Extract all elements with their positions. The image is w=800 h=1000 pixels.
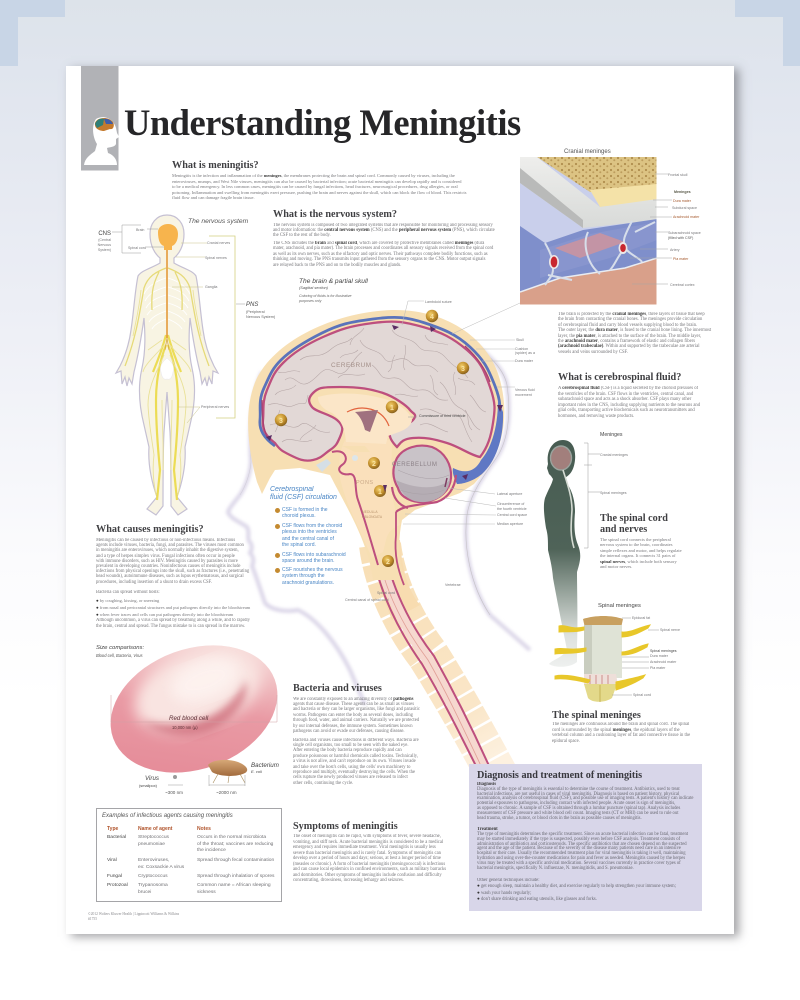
text: bacteria and viruses, part 1: through food, water, and animal carriers. Naturally we are protected — [293, 718, 419, 723]
leader lines and anatomical labels — [345, 300, 535, 602]
virus: ~300 nm — [165, 790, 183, 795]
leader lines and anatomical labels: Spinal cord — [377, 591, 395, 595]
icon: grey tab with head and brain — [81, 66, 118, 170]
table: infectious agents — [96, 808, 282, 902]
text: what causes meningitis: head wounds), autoimmune diseases, such as lupus erythematosus, and surgical — [96, 574, 244, 579]
background side block left — [0, 17, 18, 66]
labels: central nervous system: (Central — [98, 238, 111, 242]
bacterium: E. coli — [251, 769, 262, 774]
prevention text: ● get enough sleep, maintain a healthy diet, and exercise regularly to help strengthen your immune system; — [477, 884, 676, 889]
text: bacteria and viruses, part 2: cells rupture the newly produced viruses are released to infect — [293, 775, 408, 780]
background corner block left — [0, 0, 65, 17]
text: symptoms of meningitis: and dormitories. Other symptoms of meningitis include confusion and difficulty — [293, 872, 442, 878]
table rows: Common name = African sleeping — [197, 883, 271, 888]
table rows: Cryptococcus — [138, 874, 168, 879]
text: bacteria and viruses, part 2: produce poisonous or harmful chemicals called toxins. Technically, — [293, 754, 418, 759]
leader lines and anatomical labels: Lambdoid suture — [425, 300, 452, 304]
table header: Notes — [197, 826, 211, 832]
text: what causes meningitis: prevalent in developing countries. Noninfectious causes of meningitis include — [96, 564, 240, 569]
diagnosis text: Diagnosis — [477, 782, 496, 787]
labels: peripheral nerves: Peripheral nerves — [201, 405, 229, 409]
section labels on brain: CEREBRUM — [331, 362, 372, 369]
text: spinal cord and nerves: spinal nerves, which include both sensory — [600, 558, 677, 564]
chart: body silhouette with meninges — [544, 432, 628, 667]
legend items — [275, 507, 346, 586]
legend items: arachnoid granulations. — [282, 580, 334, 586]
text: spinal cord and nerves: and motor nerves. — [600, 564, 632, 569]
treatment text: virus may be treated with a specific antiviral medication. Several vaccines currently in practice cover types of — [477, 861, 681, 866]
text: what is the nervous system, part 1 — [273, 222, 495, 238]
labels: central nervous system: Brain — [136, 228, 144, 232]
text: what is cerebrospinal fluid — [558, 386, 700, 418]
table rows: the incidence — [197, 848, 226, 853]
numbered circulation markers: 3 — [461, 366, 465, 373]
text: bacteria and viruses, part 1 — [293, 696, 420, 734]
diagnosis text: potential exposures to pathogens, including contact with infected people. Acute onset is sign of meningitis, — [477, 801, 675, 806]
labels: central nervous system — [98, 225, 164, 253]
treatment text: may be started immediately if the type is suspected, possibly even before CSF analysis. Treatment consists of — [477, 837, 680, 842]
legend items: system through the — [282, 573, 325, 579]
leader lines and anatomical labels: Lateral aperture — [497, 492, 522, 496]
table rows: of the throat; vaccines are reducing — [197, 842, 273, 847]
spinal labels: Spinal nerve — [660, 628, 680, 632]
text: bacteria and viruses, part 1: worms. Pathogens can enter the body as several doses, including — [293, 713, 413, 718]
diagnosis text: as opposed to chronic. A sample of CSF is obtained through a lumbar puncture (spinal tap). Analysis includes — [477, 806, 680, 811]
treatment text: The type of meningitis determines the specific treatment. Since an acute bacterial infection can be fatal, treatment — [477, 832, 688, 837]
chart: spinal meninges — [554, 603, 680, 702]
chart: size comparison of red blood cell, bacterium and virus: 10,000 nm (µ) — [172, 725, 198, 730]
table rows: Viral — [107, 858, 117, 863]
text: what is cerebrospinal fluid: subarachnoid space and acts as a shock absorber. CSF plays many other — [558, 397, 691, 402]
text: cranial meninges description: The outer layer, the dura mater, is fused to the cranial bone lining. The innermost — [558, 328, 711, 333]
text: cranial meninges description: the arachnoid mater, contains a framework of elastic and collagen fibers — [558, 339, 695, 344]
text: spinal cord and nerves: the internal organs. It connects 31 pairs of — [600, 553, 676, 558]
text: how it spreads: Bacteria can spread without hosts: — [96, 590, 160, 594]
text: the spinal meninges: epidural space. — [552, 738, 580, 744]
numbered circulation markers: 4 — [430, 314, 434, 321]
virus: (smallpox) — [139, 783, 158, 788]
meninges labels: Meninges — [600, 432, 623, 438]
brain folds — [268, 328, 486, 442]
legend heading — [270, 486, 337, 501]
text: what is the nervous system, part 1: The nervous system is composed of two integrated systems that are responsible for monitoring and processing sensory — [273, 222, 493, 228]
diagnosis text — [477, 782, 694, 821]
spinal labels: Spinal cord — [633, 693, 651, 697]
text: what causes meningitis — [96, 538, 250, 585]
text: symptoms of meningitis: severe than bacterial meningitis and is rarely fatal. Symptoms of meningitis can — [293, 850, 441, 856]
table rows: Trypanosoma — [138, 883, 168, 888]
text: the spinal meninges — [552, 722, 690, 744]
spine and spinal cord — [371, 540, 497, 775]
text: what is the nervous system, part 2: thinking and moving. The PNS transmits input gathered from the sensory organs to the CNS. Motor output signals — [273, 257, 485, 262]
brain and partial skull caption: (Sagittal section) — [299, 285, 329, 290]
chart: nervous system figure — [98, 214, 276, 516]
text: bacteria and viruses, part 2: single cell organisms, too small to be seen with the naked eye. — [293, 743, 409, 748]
poster panel — [66, 66, 734, 934]
diagnosis text: measurement of CSF pressure and white blood cell count. Imaging tests (CT or MRI) can be used to rule out — [477, 811, 678, 816]
section labels on brain: OBLONGATA — [362, 515, 383, 519]
spinal labels: Spinal meninges — [650, 649, 677, 653]
numbered circulation markers: 3 — [279, 418, 283, 425]
prevention text: ● wash your hands regularly; — [477, 890, 531, 896]
table rows: Occurs in the normal microbiota — [197, 835, 266, 840]
leader lines and anatomical labels: Commissure of third ventricle — [419, 414, 466, 418]
numbered circulation markers: 1 — [390, 405, 394, 412]
text: symptoms of meningitis: concentrating, drowsiness, increasing lethargy and seizures. — [293, 878, 404, 883]
labels: peripheral nerves: Cranial nerves — [207, 241, 230, 245]
table title: Examples of infectious agents causing meningitis — [102, 813, 233, 819]
diagnosis text: examination, analysis of cerebrospinal fluid (CSF), and possible use of imaging tests. A patient's history can indicate — [477, 796, 693, 801]
text: symptoms of meningitis: develop over a period of hours and days; serious, at best a longer period of time — [293, 856, 441, 861]
table rows: Fungal — [107, 874, 122, 879]
text: what is cerebrospinal fluid: the ventricles of the brain. CSF flows in the ventricles, central canal, and — [558, 392, 693, 396]
cranial meninges labels: Frontal skull — [668, 173, 688, 177]
section labels on brain — [331, 362, 437, 519]
heading: what is the nervous system: What is the nervous system? — [273, 209, 397, 220]
meninges labels — [584, 432, 628, 548]
legend items: CSF flows into subarachnoid — [282, 552, 346, 558]
text: symptoms of meningitis: The onset of meningitis can be rapid, with symptoms of fever, severe headache, — [293, 834, 441, 839]
cranial meninges labels: Pia mater — [673, 257, 689, 261]
brain and partial skull caption — [298, 278, 368, 303]
spinal labels — [598, 603, 680, 697]
text: the spinal meninges: cord is surrounded by the spinal meninges, the epidural layers of the — [552, 728, 680, 732]
CSF circulation legend — [270, 486, 346, 586]
background corner block right — [735, 0, 800, 17]
heading: what is cerebrospinal fluid: What is cerebrospinal fluid? — [558, 372, 681, 383]
text: what is meningitis: enteroviruses, mumps, and West Nile viruses, meningitis can also be caused by bacterial infection; acute bacterial meningitis can develop rapidly and is considered — [172, 178, 462, 184]
leader lines and anatomical labels: the fourth ventricle — [497, 507, 527, 511]
heading: what is meningitis: What is meningitis? — [172, 160, 259, 171]
text: what is meningitis — [172, 173, 466, 200]
labels: peripheral nerves: PNS — [246, 302, 258, 308]
labels: peripheral nerves: (Peripheral — [246, 310, 265, 314]
text: what is meningitis: to be a medical emergency. In less common cases, meningitis can be caused by fungal infections, head fractures, neurosurgical procedures, drug allergies, or oral — [172, 184, 458, 189]
text: cranial meninges description: of cerebrospinal fluid and carry blood vessels supplying blood to the brain. — [558, 323, 697, 328]
leader lines and anatomical labels: movement — [515, 393, 532, 397]
brainstem — [339, 440, 400, 558]
heading: the spinal cord and nerves — [600, 513, 668, 535]
treatment text: Treatment — [477, 827, 498, 832]
cranial meninges labels: Meninges — [674, 190, 691, 194]
corpus callosum and third ventricle — [318, 393, 412, 452]
list: transmission routes — [96, 598, 250, 617]
labels: central nervous system: System) — [98, 248, 111, 252]
text: what is the nervous system, part 2 — [273, 240, 494, 268]
leader lines and anatomical labels: Circumference of — [497, 502, 524, 506]
virus — [139, 775, 183, 795]
legend items: CSF flows from the choroid — [282, 522, 342, 528]
legend heading: Cerebrospinal — [270, 486, 314, 493]
text: cranial meninges description: the brain from contacting the cranial bones. The meninges provide circulation — [558, 317, 702, 322]
table rows: Spread through inhalation of spores — [197, 874, 274, 879]
cranial meninges labels: Arachnoid mater — [673, 215, 700, 219]
cranial meninges labels: Cerebral cortex — [670, 283, 695, 287]
footer credit — [88, 912, 179, 921]
text: bacteria and viruses, part 2: and take over the host's cells, using the cells' own machinery to — [293, 765, 410, 770]
table rows: brucei — [138, 890, 151, 895]
panel heading: Diagnosis and treatment of meningitis — [477, 770, 642, 781]
cranial meninges labels — [564, 149, 701, 287]
treatment text: bacterial meningitis, specifically N. influenzae, N. meningitidis, and S. pneumoniae. — [477, 866, 634, 871]
text: what causes meningitis: with immune disorders, such as HIV. Meningitis caused by parasites is more — [96, 559, 238, 564]
text: cranial meninges description: (arachnoid trabeculae). Within and supported by the trabeculae are arterial — [558, 344, 700, 349]
text: symptoms of meningitis: vomiting, and stiff neck. Acute bacterial meningitis is considered to be a medical — [293, 840, 443, 844]
text: what is the nervous system, part 2: as well as its own nerves, such as the olfactory and optic nerves. Their pathways complete bodily functions, such as — [273, 252, 488, 256]
skull bone — [248, 310, 504, 580]
meninges labels: Cranial meninges — [600, 453, 628, 457]
head silhouette — [228, 330, 530, 705]
list: transmission routes: ● by coughing, kissing, or sneezing — [96, 598, 159, 602]
spinal labels: Arachnoid mater — [650, 660, 677, 664]
text: what is meningitis: poisoning. Inflammation and swelling from meningitis exert pressure, pushing the brain and nerves against the skull, which can block the flow of blood. This restricts — [172, 190, 466, 194]
fluid pathway around brainstem — [332, 451, 378, 565]
text: cranial meninges description: vessels and veins surrounded by CSF. — [558, 350, 628, 355]
list: transmission routes: ● from nasal and pericranial structures and put pathogens directly into the bloodstream — [96, 604, 250, 610]
treatment text: hydration and using over-the-counter medications for pain and fever as needed. Meningitis caused by the herpes — [477, 856, 685, 861]
text: what is meningitis: Meningitis is the infection and inflammation of the meninges, the membranes protecting the brain and spinal cord. Commonly caused by viruses, including the — [172, 173, 455, 178]
heading: the spinal cord and nerves: and nerves — [600, 524, 647, 535]
legend items: space around the brain. — [282, 558, 335, 564]
leader lines and anatomical labels: Dura mater — [515, 359, 534, 363]
bacterium: ~2000 nm — [216, 790, 237, 795]
treatment text — [477, 827, 688, 871]
chart: cranial meninges cross section — [520, 148, 701, 304]
text: bacteria and viruses, part 2: After entering the body bacteria reproduce rapidly and can — [293, 748, 402, 753]
cranial meninges labels: (filled with CSF) — [668, 236, 693, 240]
prevention text: Other general techniques include: — [477, 878, 540, 882]
numbered circulation markers: 2 — [372, 461, 376, 468]
text: symptoms of meningitis — [293, 834, 446, 883]
text: bacteria and viruses, part 1: agents that cause disease. These agents can be as small as viruses — [293, 702, 414, 707]
heading: what causes meningitis: What causes meningitis? — [96, 524, 204, 535]
footer credit: #1755 — [88, 917, 97, 921]
table rows — [107, 834, 274, 895]
table header: Type — [107, 826, 118, 832]
section labels on brain: CEREBELLUM — [392, 461, 437, 468]
text: what is meningitis: fluid flow and can damage fragile brain tissue. — [172, 195, 255, 200]
labels: peripheral nerves: Nervous System) — [246, 315, 276, 319]
background side block right — [783, 17, 800, 66]
text: what is cerebrospinal fluid: glial cells, transporting active biochemicals such as neurotransmitters and — [558, 408, 695, 413]
spinal labels: Dura mater — [650, 654, 669, 658]
legend items: CSF is formed in the — [282, 507, 328, 513]
spinal labels: Pia mater — [650, 666, 666, 670]
legend items: and the central canal of — [282, 536, 334, 542]
table rows: Protozoal — [107, 883, 128, 888]
brain and partial skull caption: Coloring of fluids is for illustrative — [299, 294, 352, 298]
leader lines and anatomical labels: (spider) as a — [515, 351, 535, 355]
cranial meninges labels: Subdural space — [672, 206, 697, 210]
leader lines and anatomical labels: Central cord space — [497, 513, 527, 517]
table rows: sickness — [197, 890, 216, 895]
heading: symptoms of meningitis: Symptoms of meningitis — [293, 821, 398, 832]
legend heading: fluid (CSF) circulation — [270, 494, 337, 501]
text: symptoms of meningitis: and can cause local epidemics in confined environments, such as military barracks — [293, 867, 446, 872]
section labels on brain: MEDULLA — [362, 510, 378, 514]
brain and partial skull caption: The brain & partial skull — [299, 278, 368, 285]
cranial meninges labels: Subarachnoid space — [668, 231, 701, 235]
cerebellum — [392, 446, 456, 585]
leader lines and anatomical labels: Skull — [516, 338, 524, 342]
text: what causes meningitis: agents include viruses, bacteria, fungi, and parasites. The viruses most common — [96, 543, 244, 548]
flow arrows — [266, 325, 503, 492]
labels: central nervous system: Nervous — [98, 243, 111, 247]
text: what is cerebrospinal fluid: important roles in the CNS, including supplying nutrients to the neurons and — [558, 402, 700, 408]
numbered circulation markers — [275, 310, 469, 567]
prevention text — [477, 878, 676, 902]
cranial meninges labels: Dura mater — [673, 199, 692, 203]
table header — [107, 826, 211, 832]
chart: size comparison of red blood cell, bacterium and virus: Size comparisons: — [96, 645, 144, 651]
leader lines and anatomical labels: Vertebrae — [445, 583, 461, 587]
table header: Name of agent — [138, 826, 172, 832]
numbered circulation markers: 2 — [386, 559, 390, 566]
chart: size comparison of red blood cell, bacterium and virus: Red blood cell — [169, 715, 209, 722]
title: Understanding Meningitis — [124, 102, 521, 143]
text: what causes meningitis: procedures, including insertion of a shunt to drain excess CSF. — [96, 580, 212, 585]
heading: the spinal meninges: The spinal meninges — [552, 710, 641, 721]
treatment text: agent and the age of the patient. Because of the severity of the disease many patients need care in an intensive — [477, 846, 681, 851]
text: bacteria and viruses, part 1: and bacteria or they can be larger organisms, like fungi and parasitic — [293, 707, 420, 712]
labels: peripheral nerves: Spinal nerves — [205, 256, 227, 260]
text: spinal cord and nerves: The spinal cord connects the peripheral — [600, 536, 671, 542]
treatment text: hospital or their care. Usually the recommended treatment plan for viral meningitis is taking it well, maintaining — [477, 851, 686, 856]
text: bacteria and viruses, part 1: by our internal defenses, the immune system. Sometimes known — [293, 724, 413, 729]
bacterium — [208, 760, 279, 795]
footer credit: ©2012 Wolters Kluwer Health | Lippincott Williams & Wilkins — [88, 912, 179, 916]
text: cranial meninges description: layer, the pia mater, is attached to the surface of the brain. The middle layer, — [558, 334, 701, 339]
table rows: ex: Coxsackie A virus — [138, 865, 184, 870]
chart: head sagittal section with brain, skull and spine — [225, 300, 535, 768]
text: spinal cord and nerves — [600, 536, 682, 569]
text: what causes meningitis: infections from physical openings into the skull, such as fractures (i.e., penetrating — [96, 569, 249, 574]
text: the spinal meninges: The meninges are continuous around the brain and spinal cord. The spinal — [552, 722, 689, 727]
text: spinal cord and nerves: nervous system to the brain, coordinates — [600, 542, 672, 547]
spinal labels: Spinal meninges — [598, 603, 641, 609]
text: bacteria and viruses, part 2 — [293, 738, 419, 786]
bacterium: Bacterium — [251, 762, 279, 769]
text: symptoms of meningitis: emergency and requires immediate treatment. Viral meningitis is usually less — [293, 845, 436, 850]
text: spinal cord and nerves: simple reflexes and motor, and helps regulate — [600, 548, 682, 552]
text: symptoms of meningitis: (measles or chronic). A form of bacterial meningitis (meningococcal) is infectious — [293, 862, 445, 866]
text: bacteria and viruses, part 2: a virus is not alive, and can't reproduce on its own. Viruses invade — [293, 759, 416, 764]
text: airborne transmission: the brain, central and spread. The fungus mistake to is can spread in the marrow. — [96, 624, 245, 628]
legend items: CSF nourishes the nervous — [282, 567, 343, 573]
spinal labels: Epidural fat — [632, 616, 650, 620]
labels: central nervous system: CNS — [98, 231, 111, 237]
leader lines and anatomical labels: Cushion — [515, 347, 528, 351]
leader lines and anatomical labels: Venous fluid — [515, 388, 535, 392]
table rows: Streptococcus — [138, 835, 169, 840]
text: airborne transmission — [96, 618, 250, 628]
chart: size comparison of red blood cell, bacterium and virus: Blood cell, Bacteria, Virus — [96, 653, 143, 658]
leader lines and anatomical labels: Central canal of spinal cord — [345, 598, 389, 602]
labels: peripheral nerves: The nervous system — [188, 218, 249, 225]
legend items: plexus into the ventricles — [282, 529, 337, 535]
labels: peripheral nerves — [172, 218, 276, 423]
text: what is the nervous system, part 2: are relayed back to the PNS and on to the bodily muscles and glands. — [273, 262, 401, 268]
table rows: pneumoniae — [138, 842, 165, 847]
legend items: the spinal cord. — [282, 542, 316, 548]
text: what causes meningitis: Meningitis can be caused by infectious or non-infectious means. Infectious — [96, 538, 235, 543]
treatment text: administration of antibiotics and corticosteroids. The specific antibiotics that are chosen depend on the suspected — [477, 842, 687, 847]
text: what causes meningitis: and a type of herpes simplex virus. Fungal infections often occur in people — [96, 554, 235, 559]
heading: bacteria and viruses: Bacteria and viruses — [293, 683, 382, 694]
heading: the spinal cord and nerves: The spinal cord — [600, 513, 668, 524]
cranial meninges labels: Cranial meninges — [564, 149, 611, 155]
text: what is cerebrospinal fluid: hormones, and removing waste products. — [558, 414, 634, 418]
text: bacteria and viruses, part 2: Bacteria and viruses cause infections in different ways. Bacteria are — [293, 738, 419, 742]
text: cranial meninges description — [558, 312, 712, 355]
chart: size comparison of red blood cell, bacterium and virus — [96, 645, 279, 795]
brain and partial skull caption: purposes only — [298, 299, 322, 303]
prevention text: ● don't share drinking and eating utensils, like glasses and forks. — [477, 897, 597, 902]
diagnosis text: Diagnosis of the type of meningitis is essential to determine the course of treatment. Antibiotics, used to treat — [477, 787, 680, 792]
legend items: choroid plexus. — [282, 513, 316, 519]
diagnosis text: bacterial infections, are not useful in cases of viral meningitis. Diagnosis is based on patient history, physical — [477, 792, 679, 797]
cranial meninges labels: Artery — [670, 248, 680, 252]
text: airborne transmission: Although uncommon, a virus can spread by breathing along a while, and to rapidly — [96, 618, 250, 623]
text: bacteria and viruses, part 1: We are constantly exposed to an amazing diversity of pathogens — [293, 696, 413, 702]
table rows: Spread through fecal contamination — [197, 858, 274, 863]
labels: central nervous system: Spinal cord — [128, 246, 146, 250]
numbered circulation markers: 1 — [378, 489, 382, 496]
virus: Virus — [145, 775, 159, 782]
diagnosis text: head trauma, stroke, a tumor, or blood clots in the brain as possible causes of meningitis. — [477, 816, 642, 821]
text: the spinal meninges: vertebral column and a cushioning layer of fat and connective tissue in the — [552, 733, 690, 738]
text: bacteria and viruses, part 2: reproduce and multiply, eventually destroying the cells. When the — [293, 770, 415, 775]
section labels on brain: PONS — [356, 480, 374, 486]
table rows: Enteroviruses, — [138, 858, 169, 863]
leader lines and anatomical labels: Median aperture — [497, 522, 523, 526]
panel: diagnosis and treatment — [469, 764, 702, 911]
text: what is the nervous system, part 2: The CNS includes the brain and spinal cord, which are covered by protective membranes called meninges (dura — [273, 240, 484, 246]
list: transmission routes: ● when fever traces and cells can put pathogens directly into the bloodstream — [96, 612, 233, 616]
text: what causes meningitis: in meningitis are enteroviruses, which normally inhabit the digestive system, — [96, 548, 239, 553]
text: bacteria and viruses, part 1: pathogens can avoid or evade our defenses, causing disease. — [293, 729, 405, 734]
cerebrum meninges bands — [260, 317, 503, 484]
text: what is cerebrospinal fluid: A cerebrospinal fluid (CSF) is a liquid secreted by the choroid plexuses of — [558, 386, 698, 391]
text: what is the nervous system, part 2: mater, arachnoid, and pia mater). The brain processes and coordinates all sensory signals received from the spinal cord — [273, 246, 493, 251]
text: what is the nervous system, part 1: the CSF to the rest of the body. — [273, 233, 331, 238]
table rows: Bacterial — [107, 835, 126, 840]
text: cranial meninges description: The brain is protected by the cranial meninges, three layers of tissue that keep — [558, 312, 705, 317]
text: what is the nervous system, part 1: and motor information: the central nervous system (CNS) and the peripheral nervous system (PNS), which circulate — [273, 228, 495, 233]
text: bacteria and viruses, part 2: other cells, continuing the cycle. — [293, 781, 353, 786]
meninges labels: Spinal meninges — [600, 491, 627, 495]
labels: peripheral nerves: Ganglia — [205, 285, 217, 289]
